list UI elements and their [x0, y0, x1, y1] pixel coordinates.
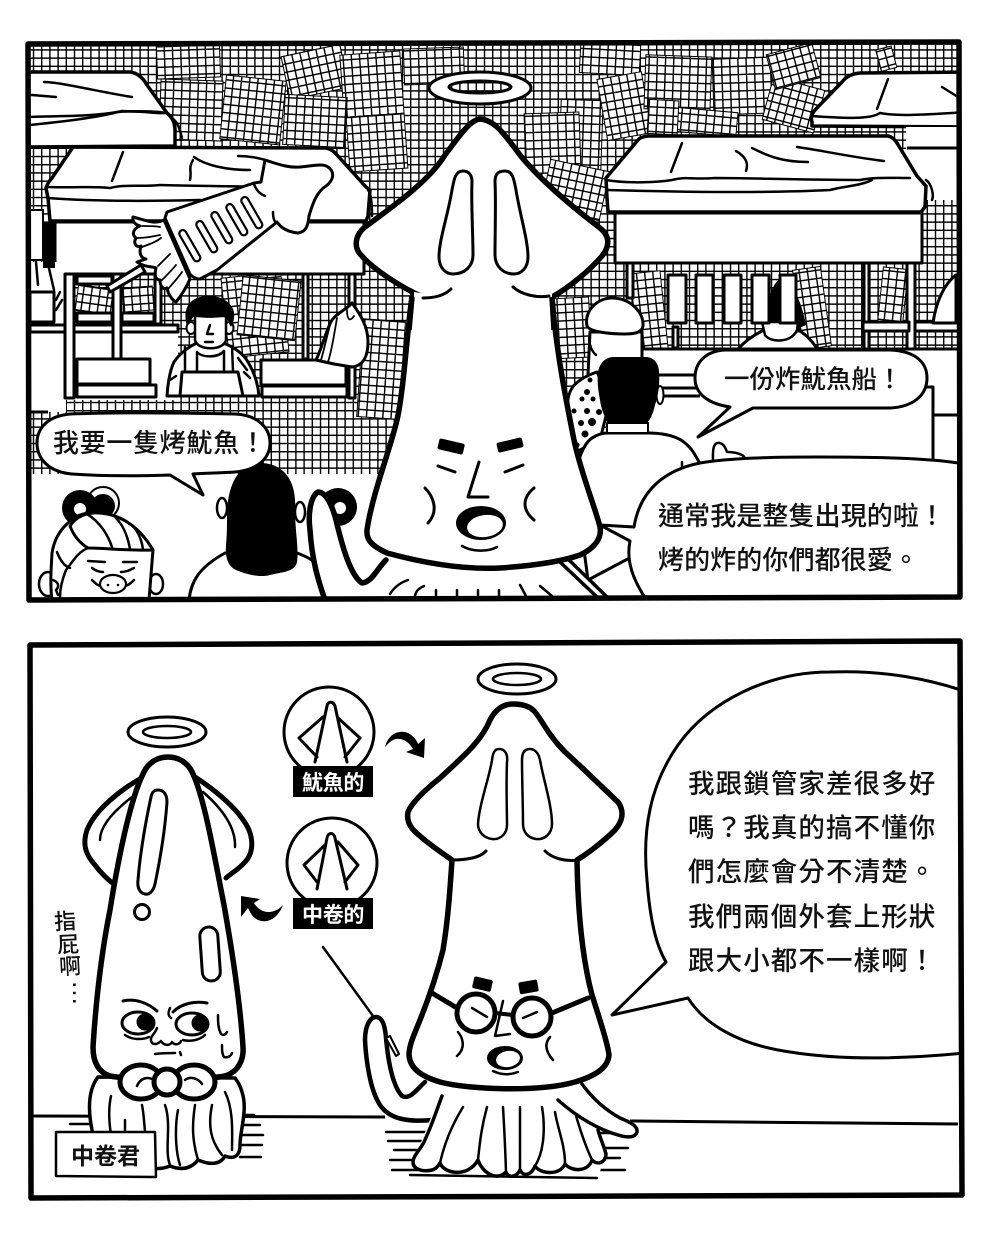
- customer with polka dot shirt: [567, 372, 610, 452]
- vertical aside text: …: [67, 980, 97, 1006]
- flying squid illustration: [107, 160, 333, 302]
- speech bubble: grilled squid order: [37, 413, 270, 495]
- right stall canopy: [606, 136, 933, 212]
- left squid body: [93, 757, 243, 1079]
- icon: squid fin shape: 魷魚的: [302, 772, 364, 795]
- bow tie: [120, 1065, 215, 1099]
- right stall sign board: [615, 213, 922, 263]
- speech bubble: explanation: 們怎麼會分不清楚。: [688, 857, 936, 887]
- speech bubble: explanation: 我跟鎖管家差很多好: [688, 769, 936, 799]
- speech bubble: grilled squid order: 我要一隻烤魷魚！: [53, 428, 267, 458]
- vendor behind right stall: [738, 278, 817, 349]
- front customer with long black hair: [188, 463, 312, 597]
- left squid mantle markings: [134, 790, 221, 982]
- speech bubble: squid statement: [602, 456, 957, 596]
- halo of big squid: [429, 72, 531, 104]
- floor line: [30, 1116, 958, 1124]
- customer in helmet: [587, 298, 643, 380]
- right squid halo: [478, 664, 556, 694]
- speech bubble: explanation: [612, 672, 975, 1058]
- left stall canopy: [46, 147, 372, 221]
- big squid raised tentacle: [309, 492, 386, 600]
- upper right stall canopy: [811, 72, 970, 200]
- right stall posts: [627, 263, 960, 351]
- right squid glasses and face: [432, 976, 588, 1074]
- right squid fin slits: [452, 749, 578, 861]
- left stall posts and shelves: [30, 210, 355, 412]
- right squid tentacles: [413, 1084, 637, 1176]
- speech bubble: explanation: 我們兩個外套上形狀: [688, 902, 936, 932]
- upper left stall canopy: [20, 72, 182, 147]
- speech bubble: explanation: 跟大小都不一樣啊！: [688, 946, 936, 976]
- icon: neritic squid fin shape: 中卷的: [302, 904, 364, 927]
- grid wall background: [29, 42, 961, 474]
- left squid face: [122, 1000, 232, 1057]
- vertical aside text: 屁: [56, 931, 80, 958]
- name tag: 中卷君: 中卷君: [71, 1143, 140, 1169]
- speech bubble: squid statement: 通常我是整隻出現的啦！: [658, 501, 945, 531]
- speech bubble: squid statement: 烤的炸的你們都很愛。: [658, 545, 919, 575]
- left stall sign board: [55, 222, 364, 274]
- raised hand: [712, 442, 746, 460]
- left squid shadow hatching: [70, 1115, 263, 1157]
- vendor behind stall: [167, 296, 259, 396]
- big squid face: [425, 437, 534, 551]
- arrow: toward left squid: [241, 896, 283, 921]
- hanging squid at stall: [316, 303, 368, 367]
- speech bubble: explanation: 嗎？我真的搞不懂你: [688, 813, 936, 843]
- speech bubble: fried squid boat order: 一份炸魷魚船！: [724, 366, 903, 394]
- right squid body: [408, 704, 622, 1089]
- left squid fins: [85, 777, 252, 884]
- icon: neritic squid fin shape: [287, 818, 377, 929]
- right squid hatching: [386, 1132, 628, 1178]
- vertical aside text: [53, 908, 97, 1006]
- panel frame top: [28, 42, 960, 600]
- left squid halo: [128, 717, 206, 747]
- pointer stick: [323, 947, 373, 1016]
- big squid tentacles: [388, 560, 608, 596]
- arrow: toward right squid: [385, 732, 425, 758]
- customer man seen from behind: [578, 357, 701, 580]
- hanging dried squid strips: [668, 275, 796, 323]
- panel: squid versus neritic squid comparison: [30, 641, 975, 1198]
- name tag: 中卷君: [56, 1132, 156, 1177]
- right squid holding tentacle: [365, 1017, 432, 1121]
- speech bubble: fried squid boat order: [695, 350, 927, 437]
- icon: squid fin shape: [284, 687, 374, 797]
- vertical aside text: 啊: [58, 953, 82, 980]
- cart wheels: [62, 487, 357, 526]
- panel: night market scene: [20, 42, 975, 605]
- front customer girl: [39, 513, 163, 600]
- vertical aside text: 指: [53, 908, 77, 935]
- left squid tentacles: [90, 1077, 244, 1169]
- panel frame bottom: [30, 641, 962, 1198]
- big squid body: [356, 119, 608, 568]
- lower right counter area: [640, 349, 958, 469]
